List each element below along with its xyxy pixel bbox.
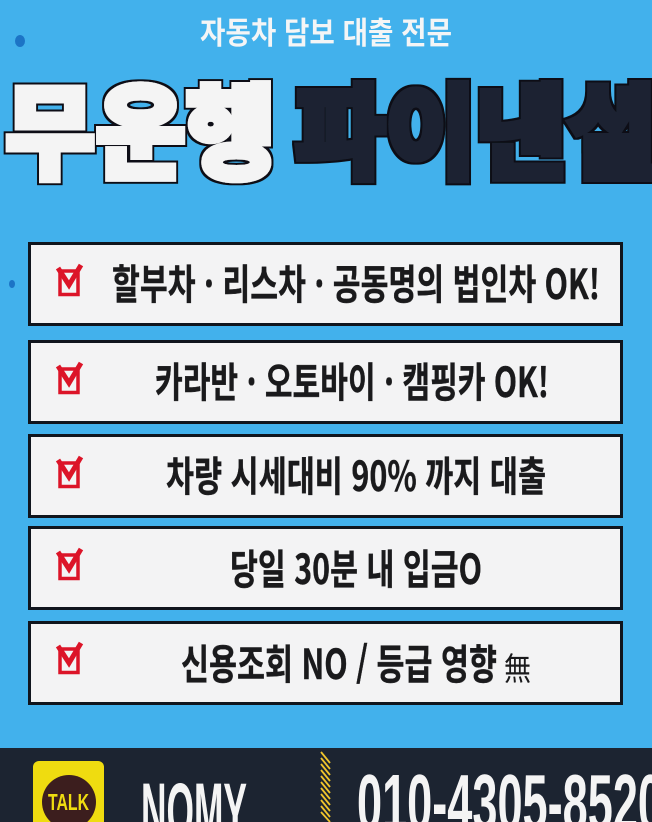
item 3: [30, 436, 622, 516]
item 5: [30, 622, 622, 704]
icon: kakao talk: [33, 761, 104, 822]
item 5: 無: [504, 644, 531, 690]
subtitle: 자동차 담보 대출 전문: [200, 8, 452, 53]
panel: checklist: [30, 244, 622, 704]
icon: check: [58, 643, 81, 672]
item 1: [30, 244, 622, 324]
icon: check: [58, 549, 81, 578]
title: white word: 무운행: [5, 51, 276, 200]
item 4: [30, 528, 622, 608]
icon: check: [58, 457, 81, 486]
footer bar: [0, 748, 652, 822]
item 5: 신용조회 NO / 등급 영향: [181, 631, 497, 691]
icon: check: [58, 363, 81, 392]
hatched divider: [321, 752, 330, 822]
item 4: 당일 30분 내 입금O: [230, 536, 482, 596]
icon: check: [58, 265, 81, 294]
item 2: [30, 342, 622, 422]
icon: kakao talk: TALK: [48, 789, 89, 815]
title: [5, 51, 652, 200]
